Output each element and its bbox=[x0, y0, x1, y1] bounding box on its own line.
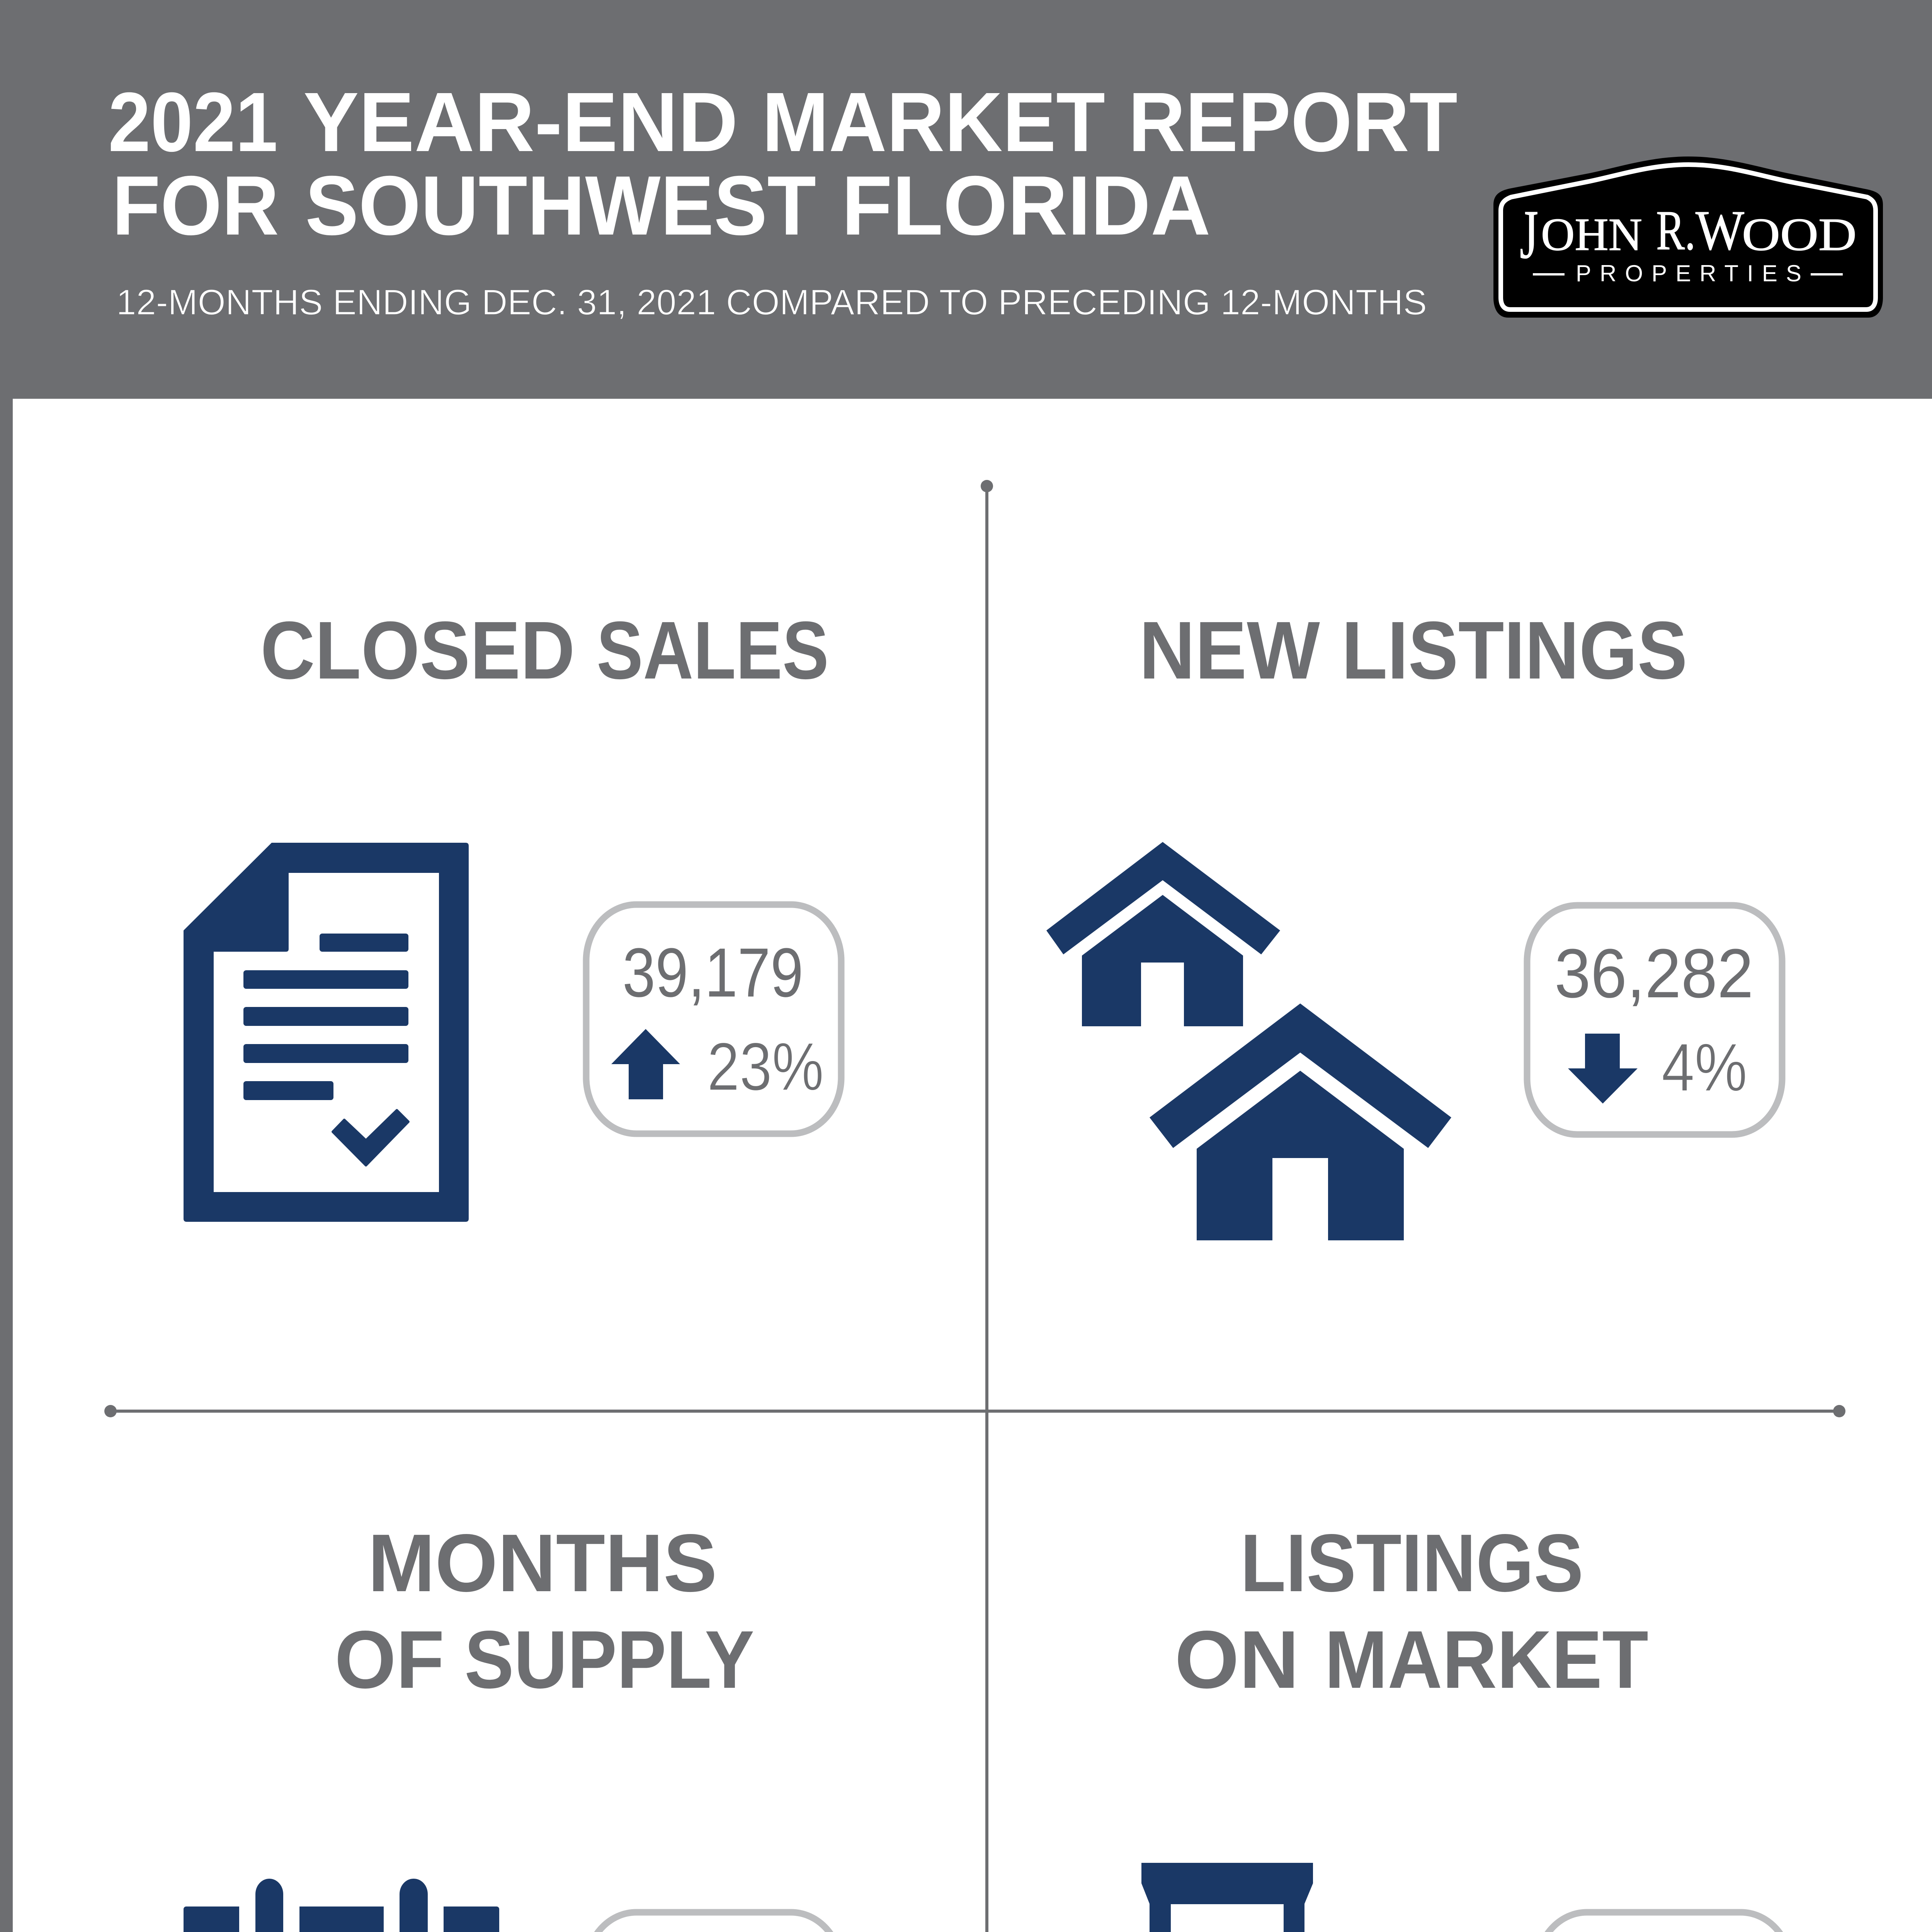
arrow up bbox=[611, 1029, 680, 1099]
value: 39,179: 39,179 bbox=[622, 934, 803, 1012]
logo: John R. Wood Properties: OOD bbox=[1742, 209, 1857, 260]
logo: John R. Wood Properties: J bbox=[1520, 196, 1538, 273]
heading: closed sales: CLOSED bbox=[260, 604, 575, 696]
logo: John R. Wood Properties: OHN bbox=[1541, 209, 1642, 260]
logo: John R. Wood Properties bbox=[1493, 156, 1883, 318]
stat badge: closed sales bbox=[586, 905, 841, 1134]
panel: new listings bbox=[1046, 604, 1782, 1240]
stat badge: listings on market bbox=[1537, 1912, 1791, 1932]
title: FLORIDA bbox=[842, 159, 1211, 253]
heading: months of supply: OF bbox=[335, 1614, 444, 1705]
heading: listings on market bbox=[1175, 1517, 1648, 1705]
title bbox=[108, 75, 1458, 253]
icon: apartment buildings bbox=[1066, 1863, 1388, 1932]
value: 36,282: 36,282 bbox=[1554, 935, 1753, 1012]
change: 4%: 4% bbox=[1662, 1030, 1747, 1105]
change: 23%: 23% bbox=[707, 1029, 824, 1105]
logo: John R. Wood Properties: W bbox=[1696, 199, 1744, 262]
title: MARKET bbox=[762, 75, 1105, 169]
heading: closed sales bbox=[260, 604, 829, 696]
arrow down bbox=[1568, 1034, 1638, 1104]
title: FOR bbox=[112, 159, 279, 253]
stat badge: months of supply bbox=[586, 1912, 841, 1932]
heading: listings on market: LISTINGS bbox=[1240, 1517, 1583, 1609]
logo: John R. Wood Properties: R. bbox=[1656, 199, 1696, 262]
stat badge: new listings bbox=[1527, 905, 1782, 1134]
heading: new listings: NEW bbox=[1139, 604, 1320, 696]
logo: John R. Wood Properties: PROPERTIES bbox=[1576, 260, 1801, 286]
heading: new listings bbox=[1139, 604, 1687, 696]
white content panel bbox=[13, 399, 1932, 1932]
subtitle: 12-MONTHS ENDING DEC. 31, 2021 COMPARED TO PRECEDING 12-MONTHS bbox=[116, 282, 1427, 322]
panel: months of supply bbox=[184, 1517, 841, 1932]
panel: listings on market bbox=[1066, 1517, 1791, 1932]
heading: months of supply: MONTHS bbox=[368, 1517, 717, 1609]
heading: listings on market: MARKET bbox=[1325, 1614, 1648, 1705]
heading: new listings: LISTINGS bbox=[1342, 604, 1687, 696]
heading: months of supply bbox=[335, 1517, 754, 1705]
horizontal divider with end dots bbox=[104, 1405, 1845, 1417]
icon: two houses bbox=[1046, 842, 1451, 1240]
heading: listings on market: ON bbox=[1175, 1614, 1299, 1705]
icon: document with checkmark bbox=[184, 843, 469, 1222]
icon: calendar bbox=[184, 1874, 499, 1932]
title: REPORT bbox=[1128, 75, 1458, 169]
title: SOUTHWEST bbox=[305, 159, 816, 253]
heading: closed sales: SALES bbox=[597, 604, 829, 696]
title: YEAR-END bbox=[303, 75, 738, 169]
title: 2021 bbox=[108, 75, 278, 169]
panel: closed sales bbox=[184, 604, 841, 1222]
vertical divider with end dots bbox=[981, 480, 993, 1932]
heading: months of supply: SUPPLY bbox=[464, 1614, 754, 1705]
